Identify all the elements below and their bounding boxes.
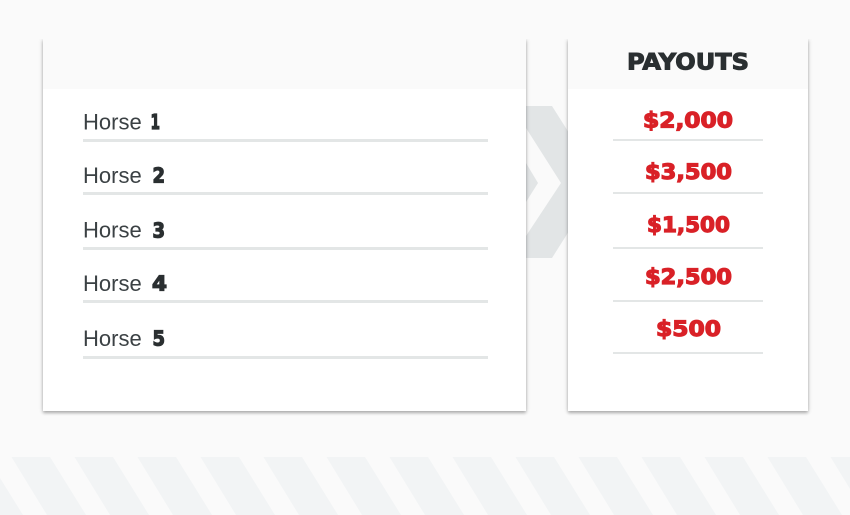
- row: horse 1: Horse: [83, 110, 142, 134]
- heading: payouts: PAYOUTS: [627, 50, 749, 76]
- row: horse 4: [83, 271, 488, 303]
- payout: $1,500: $1,500: [647, 213, 730, 237]
- row: horse 4: Horse: [83, 271, 142, 296]
- row: horse 2: Horse: [83, 163, 142, 188]
- payout: $500: $500: [656, 317, 721, 341]
- row: horse 5: Horse: [83, 326, 142, 351]
- panel: payouts: [568, 39, 808, 411]
- payout: $3,500: $3,500: [645, 160, 732, 184]
- panel header: payouts: [568, 39, 808, 89]
- row: horse 1: [83, 110, 488, 142]
- row: horse 3: [83, 218, 488, 250]
- row: horse 2: [83, 163, 488, 195]
- payout: $2,000: $2,000: [643, 108, 733, 132]
- row: horse 5: 5: [152, 326, 165, 350]
- row: horse 4: 4: [152, 272, 167, 296]
- row: horse 3: 3: [152, 218, 165, 242]
- row: horse 2: 2: [152, 164, 165, 188]
- row: horse 3: Horse: [83, 218, 142, 242]
- row: horse 5: [83, 326, 488, 359]
- panel: horses: [43, 39, 526, 411]
- payout: $2,500: $2,500: [645, 265, 732, 289]
- row: horse 1: 1: [150, 110, 160, 134]
- panel header: horses: [43, 39, 526, 89]
